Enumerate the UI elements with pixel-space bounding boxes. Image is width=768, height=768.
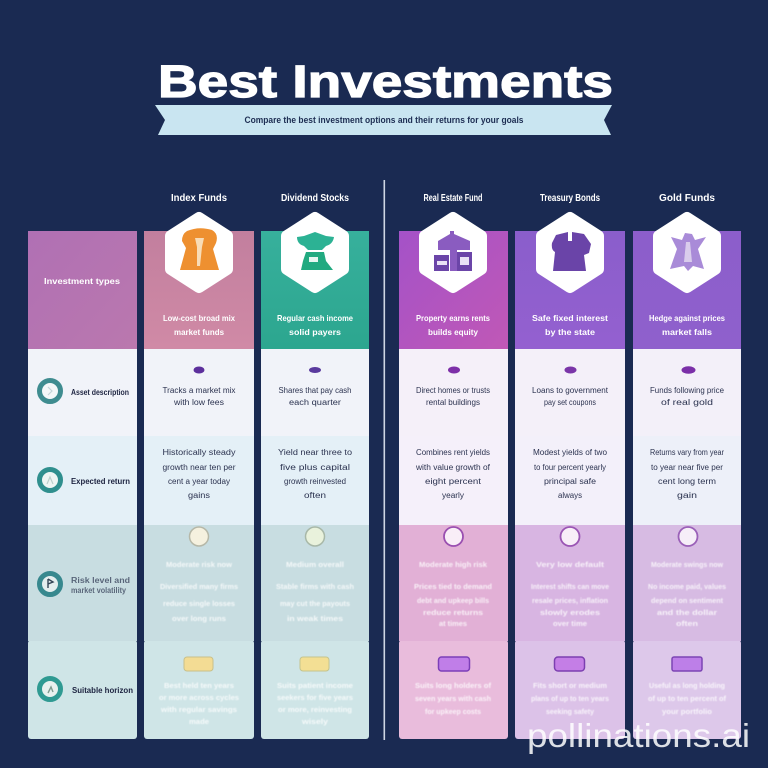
column: option 3 — [399, 193, 508, 739]
label: row 3 — [71, 576, 130, 595]
text: row 2: Historically steady — [162, 448, 236, 457]
text: row 1: rental buildings — [426, 398, 480, 407]
vertical divider — [384, 180, 385, 740]
marker: row 1 — [564, 366, 576, 374]
label: row 3: market volatility — [71, 586, 126, 595]
ribbon text: Compare the best investment options and their returns for your goals — [244, 115, 524, 125]
marker: row 4 — [300, 657, 329, 671]
header text: market funds — [174, 327, 224, 337]
text: row 2: Returns vary from year — [650, 448, 724, 457]
text: row 4 — [159, 681, 239, 726]
text: row 3: and the dollar — [657, 608, 717, 617]
column: option 2 — [261, 193, 369, 739]
text: row 2: cent a year today — [168, 477, 230, 486]
text: row 4: made — [189, 717, 209, 726]
label: row 3: Risk level and — [71, 576, 130, 585]
text: row 4: seekers for five years — [277, 693, 353, 702]
column heading: Treasury Bonds — [540, 193, 600, 204]
text: row 1: of real gold — [661, 398, 713, 407]
header text: market falls — [662, 327, 712, 337]
label: row 4: Suitable horizon — [72, 686, 133, 695]
text: row 2: often — [304, 491, 326, 500]
marker: row 4 — [438, 657, 470, 671]
text: row 3: over long runs — [172, 614, 226, 623]
marker: row 3 — [560, 527, 580, 546]
column: row labels — [28, 231, 137, 739]
text: row 3 — [648, 560, 726, 628]
text: row 2: Yield near three to — [278, 448, 353, 457]
text: row 1: with low fees — [173, 398, 224, 407]
text: row 1 — [650, 386, 725, 407]
text: row 4: with regular savings — [160, 705, 237, 714]
column: option 5 — [633, 193, 741, 739]
text: row 2: to year near five per — [651, 463, 723, 472]
text: row 4: of up to ten percent of — [648, 694, 726, 703]
header text: solid payers — [289, 327, 341, 337]
marker: row 1 — [448, 366, 460, 374]
marker: row 4 — [184, 657, 213, 671]
text: row 4: Fits short or medium — [533, 681, 607, 690]
column: option 1 — [144, 193, 254, 739]
text: row 3: over time — [553, 619, 587, 628]
text: row 2: Modest yields of two — [533, 448, 608, 457]
text: row 1 — [162, 386, 236, 407]
text: row 4: plans of up to ten years — [531, 694, 609, 703]
header text: Hedge against prices — [649, 313, 725, 323]
text: row 4 — [415, 681, 492, 716]
label: row 2: Expected return — [71, 477, 130, 486]
header text: by the state — [545, 327, 595, 337]
text: row 1: Shares that pay cash — [278, 386, 352, 395]
text: row 2: yearly — [442, 491, 464, 500]
text: row 3: Prices tied to demand — [414, 582, 492, 591]
text: row 3 — [531, 560, 609, 628]
header text: builds equity — [428, 327, 478, 337]
header text: Safe fixed interest — [532, 313, 608, 323]
text: row 3: Moderate swings now — [651, 560, 723, 569]
ribbon shape — [155, 105, 612, 135]
text: row 4: Best held ten years — [164, 681, 234, 690]
marker: row 4 — [554, 657, 584, 671]
column heading: Gold Funds — [659, 193, 715, 204]
text: row 2: five plus capital — [280, 463, 350, 472]
column heading: Real Estate Fund — [424, 193, 482, 204]
text: row 1: each quarter — [289, 398, 341, 407]
text: row 4: seven years with cash — [415, 694, 491, 703]
text: row 2: growth reinvested — [284, 477, 346, 486]
text: row 1 — [416, 386, 490, 407]
text: row 4: or more, reinvesting — [278, 705, 352, 714]
text: row 3: in weak times — [287, 614, 343, 623]
hexagon icon: purple shield — [542, 218, 598, 287]
text: row 2: principal safe — [544, 477, 597, 486]
header text: Property earns rents — [416, 313, 490, 323]
text: row 3: Stable firms with cash — [276, 582, 354, 591]
text: row 2 — [650, 448, 724, 500]
text: row 4: Suits long holders of — [415, 681, 492, 690]
text: row 3 — [276, 560, 354, 623]
text: row 1: pay set coupons — [544, 398, 596, 407]
text: row 2 — [415, 448, 491, 500]
text: row 3: may cut the payouts — [280, 599, 350, 608]
marker: row 3 — [190, 527, 208, 546]
text: row 3: reduce single losses — [163, 599, 235, 608]
hexagon icon: orange — [171, 218, 227, 287]
text: row 4: Suits patient income — [277, 681, 353, 690]
text: row 3: No income paid, values — [648, 582, 726, 591]
text: row 3: at times — [439, 619, 467, 628]
title: Best Investments — [158, 56, 613, 107]
icon: row 1 — [40, 380, 60, 402]
text: row 2: growth near ten per — [162, 463, 236, 472]
text: row 4: Useful as long holding — [649, 681, 725, 690]
text: row 4: for upkeep costs — [425, 707, 481, 716]
marker: row 3 — [306, 527, 324, 546]
text: row 1: Loans to government — [532, 386, 609, 395]
text: row 3: Diversified many firms — [160, 582, 238, 591]
header text — [416, 313, 490, 337]
marker: row 4 — [672, 657, 702, 671]
text: row 2: eight percent — [425, 477, 482, 486]
text: row 2 — [278, 448, 353, 500]
text: row 4: or more across cycles — [159, 693, 239, 702]
text: row 4: seeking safety — [546, 707, 595, 716]
text: row 3: depend on sentiment — [651, 596, 723, 605]
marker: row 1 — [682, 366, 696, 374]
label: header: Investment types — [44, 276, 120, 286]
text: row 1 — [278, 386, 352, 407]
text: row 4 — [531, 681, 609, 716]
text: row 2 — [533, 448, 608, 500]
text: row 3: Interest shifts can move — [531, 582, 609, 591]
text: row 1: Tracks a market mix — [162, 386, 236, 395]
subtitle ribbon — [155, 105, 612, 135]
icon: row 3 — [40, 574, 60, 594]
text: row 3: Very low default — [536, 560, 605, 569]
text: row 3 — [160, 560, 238, 623]
text: row 2: gains — [188, 491, 210, 500]
header text — [532, 313, 608, 337]
text: row 2: always — [558, 491, 582, 500]
header text: Regular cash income — [277, 313, 353, 323]
icon: row 4 — [40, 678, 60, 700]
text: row 3: Medium overall — [286, 560, 344, 569]
icon: row 2 — [40, 470, 60, 490]
hexagon icon: lilac figure — [659, 218, 715, 287]
text: row 2: Combines rent yields — [416, 448, 490, 457]
text: row 1: Funds following price — [650, 386, 725, 395]
text: row 4 — [648, 681, 726, 716]
marker: row 3 — [678, 527, 698, 546]
text: row 2: with value growth of — [415, 463, 491, 472]
header text: Low-cost broad mix — [163, 313, 235, 323]
text: row 2: gain — [677, 491, 697, 500]
column: option 4 — [515, 193, 625, 739]
header text — [277, 313, 353, 337]
marker: row 1 — [309, 367, 321, 373]
hexagon icon: purple building — [425, 218, 481, 287]
header text — [163, 313, 235, 337]
text: row 2: cent long term — [658, 477, 716, 486]
text: row 2 — [162, 448, 236, 500]
text: row 3: Moderate risk now — [166, 560, 232, 569]
text: row 4: wisely — [301, 717, 329, 726]
column heading: Index Funds — [171, 193, 227, 204]
label: row 1: Asset description — [71, 388, 129, 397]
text: row 1: Direct homes or trusts — [416, 386, 490, 395]
text: row 3: reduce returns — [423, 608, 483, 617]
text: row 1 — [532, 386, 609, 407]
watermark: pollinations.ai — [527, 717, 750, 754]
text: row 3: often — [676, 619, 698, 628]
text: row 3 — [414, 560, 492, 628]
text: row 3: debt and upkeep bills — [417, 596, 489, 605]
column heading: Dividend Stocks — [281, 193, 349, 204]
marker: row 1 — [194, 366, 204, 374]
text: row 3: resale prices, inflation — [532, 596, 608, 605]
header text — [649, 313, 725, 337]
text: row 4: your portfolio — [662, 707, 712, 716]
text: row 2: to four percent yearly — [534, 463, 606, 472]
hexagon icon: green — [287, 218, 343, 287]
text: row 4 — [277, 681, 353, 726]
marker: row 3 — [444, 527, 463, 546]
text: row 3: Moderate high risk — [419, 560, 488, 569]
text: row 3: slowly erodes — [540, 608, 600, 617]
